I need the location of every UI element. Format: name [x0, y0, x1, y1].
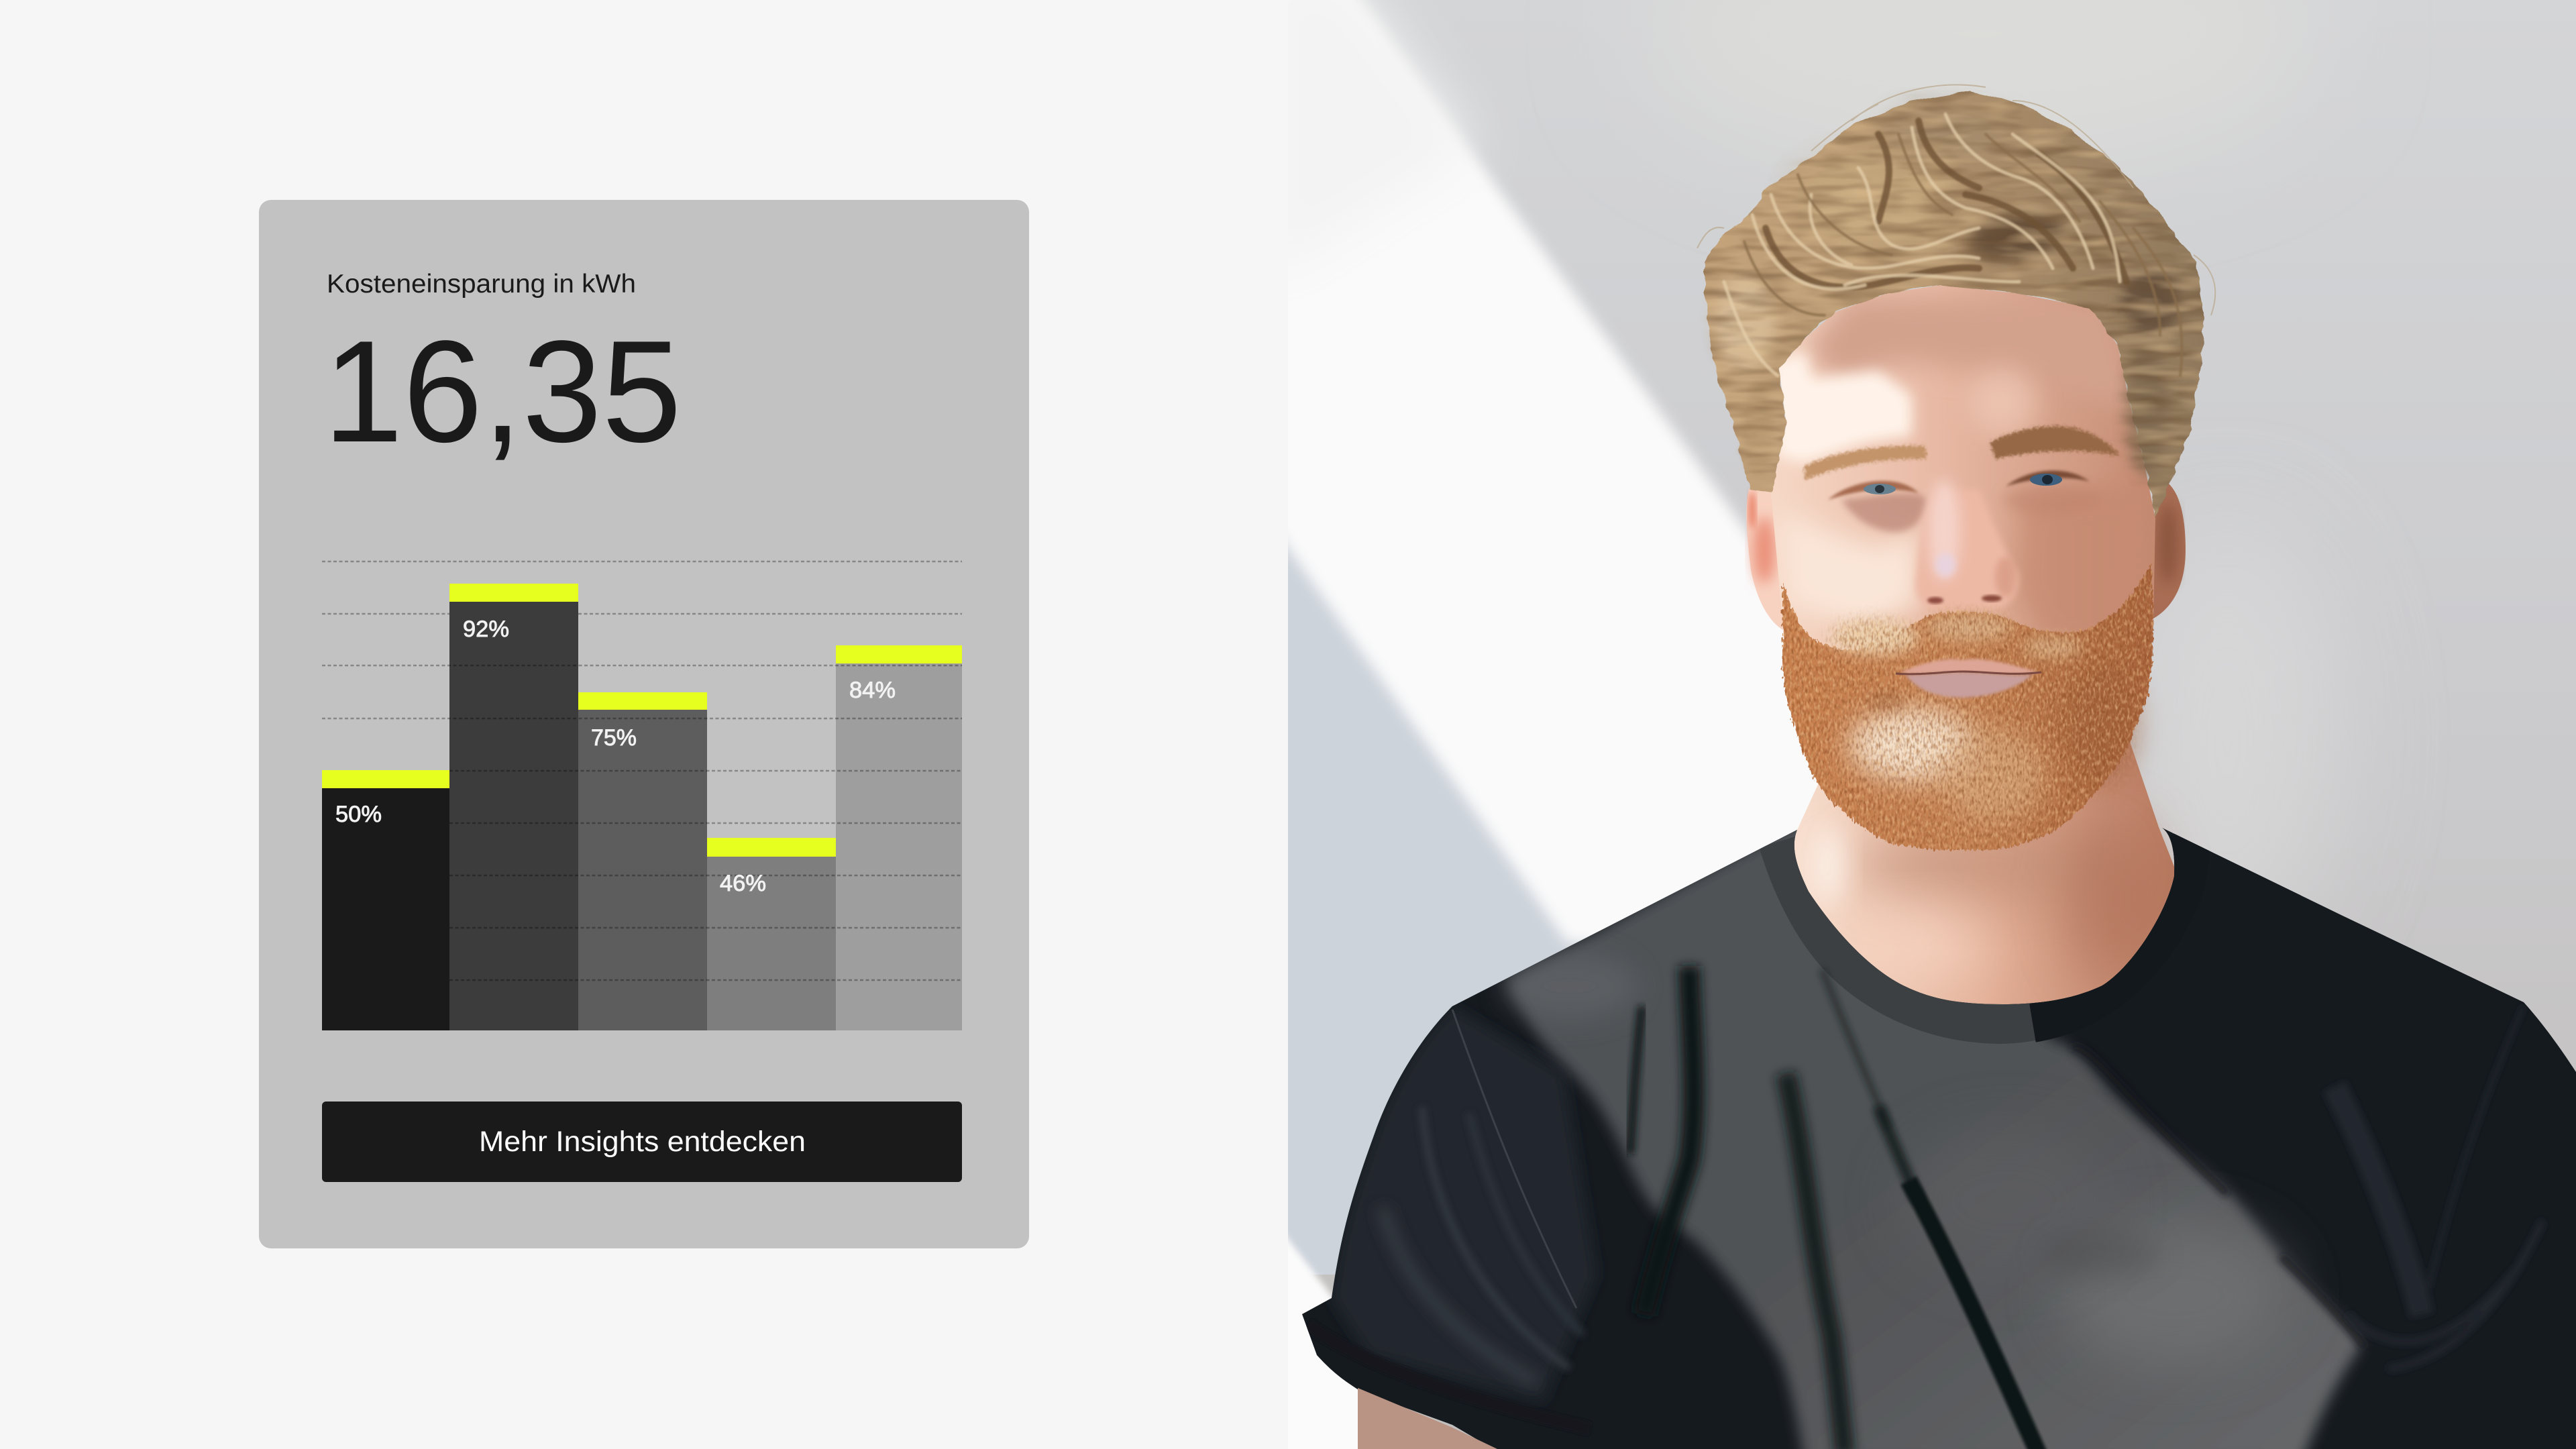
bar value labels [335, 616, 896, 896]
right sleeve folds [2326, 1083, 2543, 1371]
neck [1794, 741, 2175, 1004]
bar chart [322, 561, 962, 1030]
card background [259, 200, 1029, 1248]
hair shading [1966, 209, 2065, 264]
button [322, 1102, 962, 1182]
big number: 16,35 [323, 310, 682, 472]
left ear [1746, 486, 1791, 631]
page background [0, 0, 1288, 1449]
eyebrows [1805, 426, 2120, 480]
bar value labels: 92% [463, 616, 509, 642]
photo: portrait of man against sunlit wall [1261, 0, 2576, 1449]
bar 75% [578, 692, 707, 1030]
beard [1782, 564, 2153, 850]
hair wave strands [1724, 114, 2182, 376]
lit left cheek [1778, 510, 1919, 631]
mouth [1896, 659, 2041, 698]
hair [1697, 85, 2215, 519]
face [1771, 285, 2155, 818]
bar value labels: 50% [335, 802, 382, 827]
card label: Kosteneinsparung in kWh [327, 270, 636, 299]
stray hairs [1697, 85, 2215, 315]
button: Mehr Insights entdecken [479, 1126, 806, 1158]
shirt folds [1630, 966, 2365, 1449]
left eye [1828, 481, 1919, 500]
right ear [2153, 478, 2186, 619]
bar 50% [322, 770, 449, 1030]
panel: savings card [259, 200, 1029, 1248]
bar value labels: 84% [849, 678, 896, 703]
bar 92% [449, 584, 578, 1030]
t-shirt [1302, 818, 2576, 1449]
forearm below sleeve [1358, 1388, 1497, 1449]
collar band [1778, 828, 2190, 1024]
forehead sunlight [1771, 352, 1912, 463]
bar value labels: 75% [591, 725, 637, 751]
beard highlights [1848, 708, 1976, 782]
wall [1275, 0, 2576, 1449]
right cheek shade [2012, 483, 2147, 671]
bar value labels: 46% [720, 871, 766, 896]
bar 84% [836, 645, 962, 1030]
forehead shade [1805, 295, 2140, 416]
light beam on wall [1261, 0, 1945, 1449]
lit chest and shoulder [1506, 818, 2363, 1449]
bar 46% [707, 838, 836, 1030]
eye socket shadow [1841, 494, 1929, 532]
left sleeve shading [1308, 1006, 1597, 1429]
nose [1915, 480, 2019, 612]
right eye [2006, 471, 2090, 486]
